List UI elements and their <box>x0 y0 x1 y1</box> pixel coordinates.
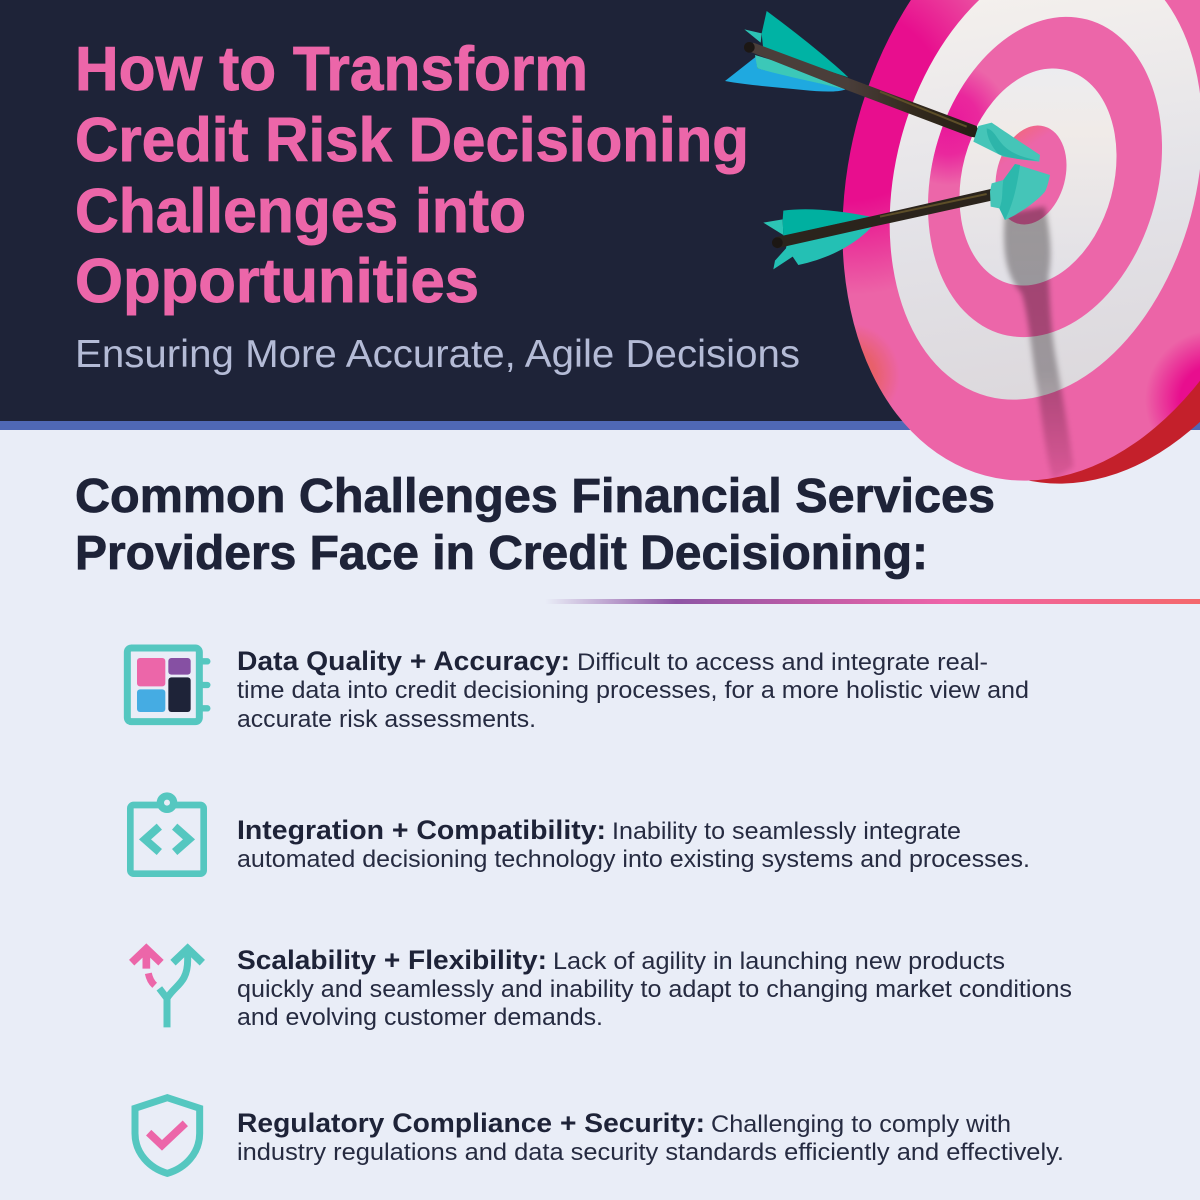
text: data quality <box>237 646 1029 733</box>
header accent band <box>0 421 1200 430</box>
text: scalability: Lack of agility in launching new products <box>553 948 1005 975</box>
section heading <box>75 470 995 580</box>
section heading: Providers Face in Credit Decisioning: <box>75 527 928 580</box>
text: scalability: Scalability + Flexibility: <box>237 945 547 975</box>
text: regulatory: Challenging to comply with <box>711 1111 1011 1138</box>
icon: code clipboard <box>130 796 204 874</box>
icon: data grid notebook <box>127 648 207 722</box>
icon: shield check <box>135 1098 200 1173</box>
text: data quality: time data into credit decisioning processes, for a more holistic view and <box>237 677 1029 704</box>
title: Challenges into <box>75 177 526 246</box>
header panel <box>0 0 1200 421</box>
section heading: Common Challenges Financial Services <box>75 470 995 523</box>
text: integration: automated decisioning technology into existing systems and processes. <box>237 846 1030 873</box>
target board illustration <box>842 0 1200 484</box>
text: regulatory: industry regulations and data security standards efficiently and effectively. <box>237 1139 1064 1166</box>
text: scalability: quickly and seamlessly and inability to adapt to changing market conditions <box>237 976 1072 1003</box>
title: Credit Risk Decisioning <box>75 106 749 175</box>
arrow: upper <box>725 11 1040 162</box>
title <box>75 35 749 316</box>
board face <box>830 0 1200 500</box>
title: How to Transform <box>75 35 588 104</box>
subtitle: Ensuring More Accurate, Agile Decisions <box>75 333 800 376</box>
title: Opportunities <box>75 247 479 316</box>
text: data quality: Data Quality + Accuracy: <box>237 646 570 676</box>
text: integration <box>237 815 1030 873</box>
text: scalability: and evolving customer demands. <box>237 1004 603 1031</box>
text: integration: Inability to seamlessly integrate <box>612 818 961 845</box>
arrow shadow <box>1004 207 1073 480</box>
text: regulatory <box>237 1108 1064 1166</box>
icon: forked arrows <box>132 949 202 1027</box>
board side edge <box>812 0 1200 534</box>
text: data quality: accurate risk assessments. <box>237 706 536 733</box>
text: regulatory: Regulatory Compliance + Security: <box>237 1108 705 1138</box>
text: data quality: Difficult to access and integrate real- <box>577 649 988 676</box>
text: integration: Integration + Compatibility: <box>237 815 606 845</box>
arrow: lower <box>763 164 1050 269</box>
text: scalability <box>237 945 1072 1031</box>
